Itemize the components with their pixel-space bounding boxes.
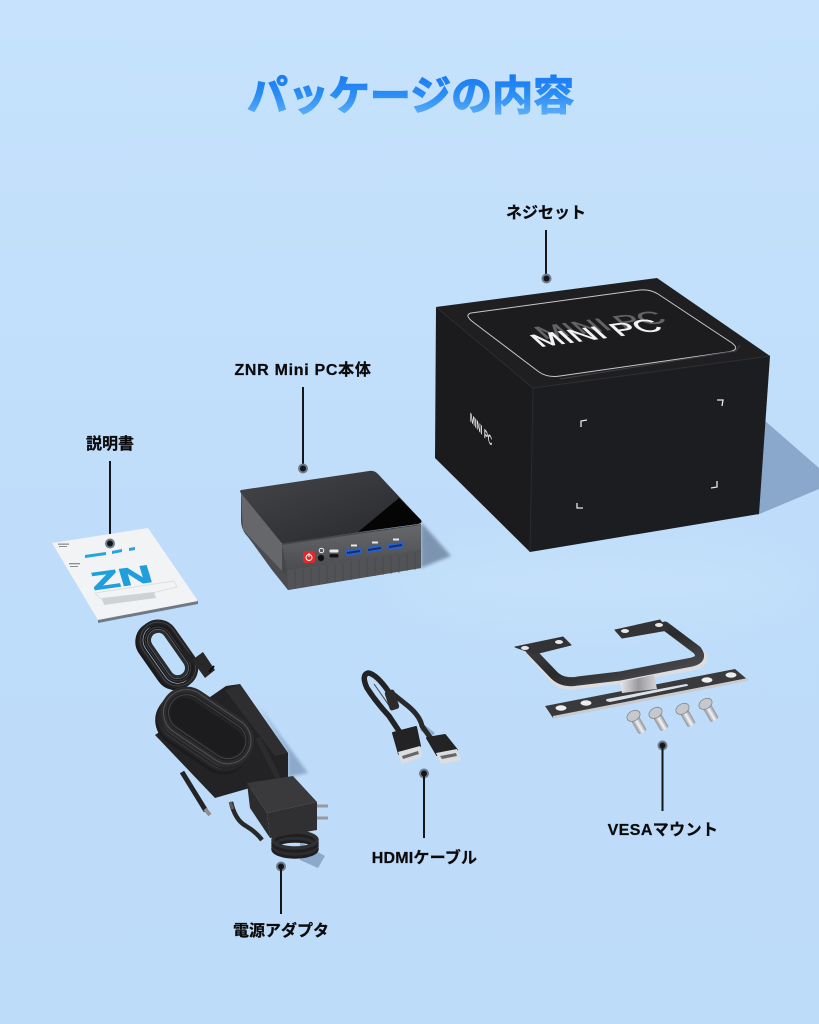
mini pc (240, 471, 451, 590)
usb ports (346, 538, 403, 556)
wall adapter (230, 776, 328, 868)
title: パッケージの内容 (247, 62, 574, 122)
vesa mount (515, 620, 748, 736)
large cable coil (150, 681, 278, 815)
box lid logo: MINI PC (525, 316, 669, 351)
u bracket (530, 626, 703, 686)
power cord plug (182, 650, 215, 678)
product box (435, 278, 819, 552)
manual stripes (85, 547, 135, 558)
flat plate (545, 669, 748, 719)
label: manual (86, 434, 134, 543)
hdmi connector right (427, 735, 461, 764)
label: power adapter: 電源アダプタ (233, 921, 329, 940)
label: vesa mount: VESAマウント (608, 821, 718, 839)
label: screw set: ネジセット (506, 204, 586, 222)
box corner marks (577, 400, 723, 508)
label: power adapter (233, 862, 329, 940)
label: hdmi cable (372, 768, 477, 867)
label: screw set (506, 204, 586, 284)
label: vesa mount (608, 740, 718, 839)
power brick (155, 684, 308, 798)
label: hdmi cable: HDMIケーブル (372, 848, 477, 867)
manual pc drawing (95, 581, 177, 605)
box lid panel (468, 290, 740, 379)
manual (52, 528, 198, 623)
power cord coil (131, 615, 215, 695)
adapter cable coil (273, 832, 317, 857)
label: mini pc (234, 361, 372, 474)
screws (625, 696, 721, 736)
hdmi connector left (393, 727, 422, 764)
usb-c port (330, 550, 338, 558)
manual small text (58, 544, 80, 567)
power button (303, 551, 315, 563)
label: mini pc: ZNR Mini PC本体 (234, 361, 372, 379)
audio jack (318, 548, 324, 561)
hdmi cable (364, 673, 461, 764)
manual logo: ZN (88, 561, 156, 596)
box side logo: MINI PC (470, 411, 492, 450)
hinge (620, 675, 657, 693)
box lid logo: MINI PC (529, 308, 673, 343)
label: manual: 説明書 (86, 434, 134, 453)
